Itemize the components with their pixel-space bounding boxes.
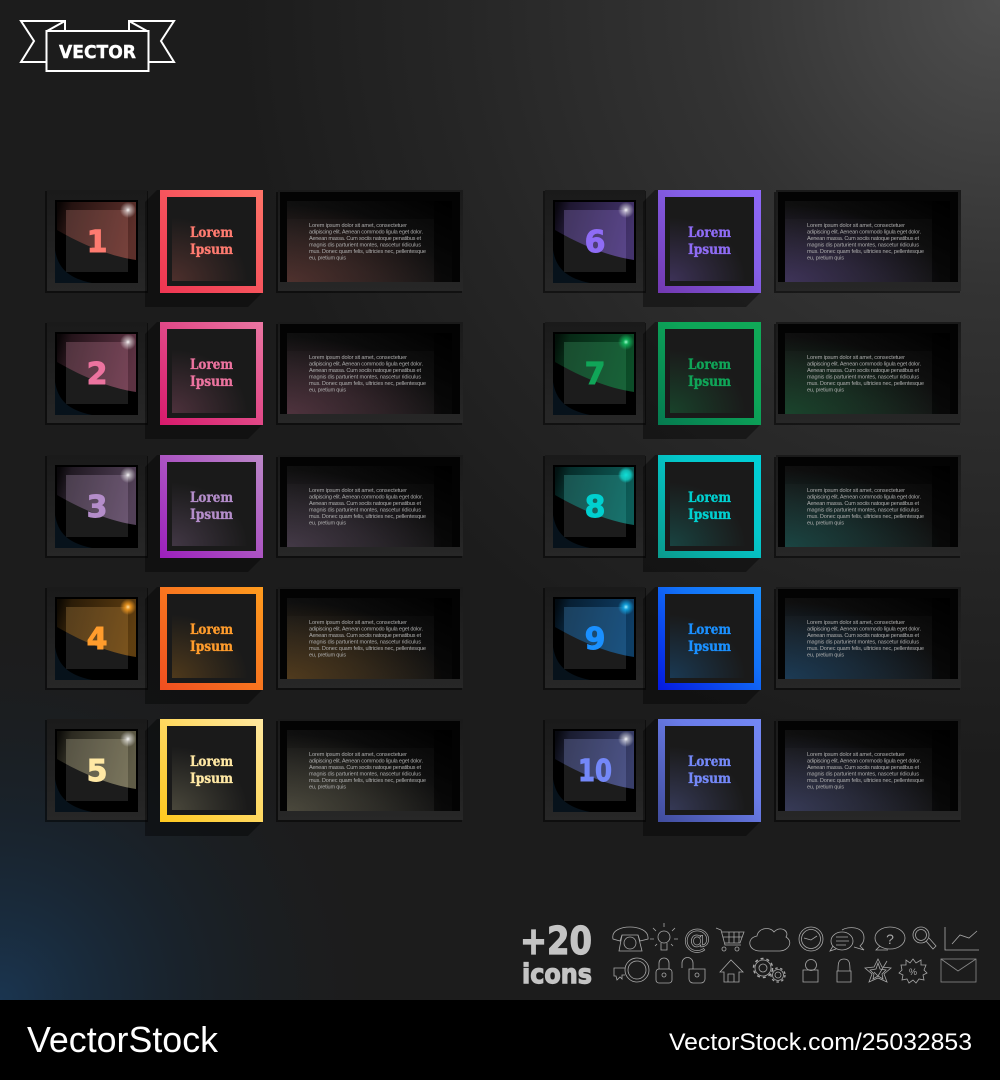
+20 icons label: +20 bbox=[520, 919, 592, 963]
title card 10: Lorem bbox=[688, 754, 731, 770]
title card 5 bbox=[145, 719, 263, 836]
number tile 6 bbox=[543, 190, 646, 293]
title card 7: Lorem bbox=[688, 357, 731, 373]
description panel 5 bbox=[276, 719, 463, 822]
number tile 6: 6 bbox=[585, 225, 605, 260]
title card 10: Ipsum bbox=[688, 771, 731, 787]
number tile 4 bbox=[45, 587, 148, 690]
title card 1: Lorem bbox=[190, 225, 233, 241]
description panel 2: Lorem ipsum dolor sit amet, consectetuer bbox=[309, 355, 407, 361]
description panel 7: adipiscing elit. Aenean commodo ligula eget dolor. bbox=[807, 362, 921, 368]
description panel 10: mus. Donec quam felis, ultricies nec, pellentesque bbox=[807, 778, 924, 784]
icon: man bbox=[803, 960, 818, 982]
description panel 1: Lorem ipsum dolor sit amet, consectetuer bbox=[309, 223, 407, 229]
description panel 7: Lorem ipsum dolor sit amet, consectetuer bbox=[807, 355, 905, 361]
number tile 1: 1 bbox=[87, 225, 107, 260]
title card 4: Lorem bbox=[190, 622, 233, 638]
description panel 2: magnis dis parturient montes, nascetur ridiculus bbox=[309, 374, 421, 380]
footer bar: VectorStock.com/25032853 bbox=[669, 1029, 972, 1056]
description panel 8: eu, pretium quis bbox=[807, 520, 844, 526]
description panel 4 bbox=[276, 587, 463, 690]
row 4 bbox=[45, 587, 463, 704]
description panel 9: mus. Donec quam felis, ultricies nec, pellentesque bbox=[807, 646, 924, 652]
description panel 4: mus. Donec quam felis, ultricies nec, pellentesque bbox=[309, 646, 426, 652]
title card 2 bbox=[145, 322, 263, 439]
description panel 5: Lorem ipsum dolor sit amet, consectetuer bbox=[309, 752, 407, 758]
description panel 6: adipiscing elit. Aenean commodo ligula eget dolor. bbox=[807, 230, 921, 236]
description panel 3: adipiscing elit. Aenean commodo ligula eget dolor. bbox=[309, 494, 423, 500]
icon: woman bbox=[837, 959, 851, 982]
icon: open lock bbox=[682, 958, 705, 983]
description panel 7: eu, pretium quis bbox=[807, 388, 844, 394]
title card 3 bbox=[145, 455, 263, 572]
description panel 10: adipiscing elit. Aenean commodo ligula eget dolor. bbox=[807, 758, 921, 764]
description panel 4: eu, pretium quis bbox=[309, 652, 346, 658]
title card 7: Ipsum bbox=[688, 374, 731, 390]
description panel 9: magnis dis parturient montes, nascetur ridiculus bbox=[807, 640, 919, 646]
icon: magnifier bbox=[913, 927, 936, 949]
icon: percent badge: % bbox=[909, 967, 917, 977]
ribbon badge: VECTOR bbox=[21, 21, 174, 71]
description panel 4: Lorem ipsum dolor sit amet, consectetuer bbox=[309, 620, 407, 626]
description panel 8 bbox=[774, 455, 961, 558]
icon: light bulb bbox=[650, 923, 678, 950]
icon: question bubble: ? bbox=[886, 931, 894, 947]
icon: house bbox=[720, 960, 743, 982]
description panel 2 bbox=[276, 322, 463, 425]
description panel 4: magnis dis parturient montes, nascetur ridiculus bbox=[309, 640, 421, 646]
title card 6: Lorem bbox=[688, 225, 731, 241]
number tile 2: 2 bbox=[87, 357, 107, 392]
title card 5: Ipsum bbox=[190, 771, 233, 787]
description panel 9 bbox=[774, 587, 961, 690]
description panel 4: Aenean massa. Cum sociis natoque penatibus et bbox=[309, 633, 421, 639]
number tile 1 bbox=[45, 190, 148, 293]
footer bar bbox=[0, 1000, 1000, 1080]
title card 10 bbox=[643, 719, 761, 836]
title card 8: Lorem bbox=[688, 490, 731, 506]
ribbon badge: VECTOR: VECTOR bbox=[59, 42, 136, 63]
description panel 2: mus. Donec quam felis, ultricies nec, pellentesque bbox=[309, 381, 426, 387]
icon: line chart bbox=[945, 927, 979, 950]
number tile 9 bbox=[543, 587, 646, 690]
description panel 5: Aenean massa. Cum sociis natoque penatibus et bbox=[309, 765, 421, 771]
description panel 1 bbox=[276, 190, 463, 293]
description panel 5: magnis dis parturient montes, nascetur ridiculus bbox=[309, 772, 421, 778]
icon: chat bubbles bbox=[830, 928, 864, 951]
icon set bbox=[613, 923, 979, 983]
number tile 10: 10 bbox=[578, 754, 612, 789]
description panel 9: Aenean massa. Cum sociis natoque penatibus et bbox=[807, 633, 919, 639]
title card 3: Lorem bbox=[190, 490, 233, 506]
icon: shopping cart bbox=[716, 928, 744, 951]
row 2 bbox=[45, 322, 463, 439]
description panel 7 bbox=[774, 322, 961, 425]
description panel 1: mus. Donec quam felis, ultricies nec, pellentesque bbox=[309, 249, 426, 255]
title card 1: Ipsum bbox=[190, 242, 233, 258]
description panel 10 bbox=[774, 719, 961, 822]
description panel 8: Aenean massa. Cum sociis natoque penatibus et bbox=[807, 501, 919, 507]
number tile 3: 3 bbox=[87, 490, 107, 525]
title card 5: Lorem bbox=[190, 754, 233, 770]
icon: gears bbox=[754, 958, 785, 982]
icon: clock bbox=[799, 927, 823, 951]
description panel 3: Aenean massa. Cum sociis natoque penatibus et bbox=[309, 501, 421, 507]
title card 9 bbox=[643, 587, 761, 704]
number tile 5: 5 bbox=[87, 754, 107, 789]
footer bar: VectorStock bbox=[27, 1019, 219, 1060]
description panel 8: Lorem ipsum dolor sit amet, consectetuer bbox=[807, 488, 905, 494]
description panel 10: eu, pretium quis bbox=[807, 784, 844, 790]
+20 icons label: icons bbox=[522, 959, 592, 990]
icon: question bubble bbox=[875, 927, 905, 950]
title card 4 bbox=[145, 587, 263, 704]
icon: at sign: @ bbox=[684, 924, 710, 955]
title card 8: Ipsum bbox=[688, 507, 731, 523]
description panel 10: Aenean massa. Cum sociis natoque penatibus et bbox=[807, 765, 919, 771]
row 5 bbox=[45, 719, 463, 836]
title card 9: Ipsum bbox=[688, 639, 731, 655]
number tile 2 bbox=[45, 322, 148, 425]
number tile 8 bbox=[543, 455, 646, 558]
description panel 9: eu, pretium quis bbox=[807, 652, 844, 658]
description panel 4: adipiscing elit. Aenean commodo ligula eget dolor. bbox=[309, 626, 423, 632]
description panel 9: Lorem ipsum dolor sit amet, consectetuer bbox=[807, 620, 905, 626]
title card 2: Lorem bbox=[190, 357, 233, 373]
icon: percent badge bbox=[899, 959, 927, 983]
title card 6 bbox=[643, 190, 761, 307]
description panel 2: eu, pretium quis bbox=[309, 388, 346, 394]
number tile 9: 9 bbox=[585, 622, 605, 657]
description panel 3 bbox=[276, 455, 463, 558]
title card 1 bbox=[145, 190, 263, 307]
icon: key bbox=[614, 958, 649, 982]
+20 icons label bbox=[520, 919, 592, 990]
number tile 4: 4 bbox=[87, 622, 107, 657]
description panel 6: mus. Donec quam felis, ultricies nec, pellentesque bbox=[807, 249, 924, 255]
description panel 2: Aenean massa. Cum sociis natoque penatibus et bbox=[309, 368, 421, 374]
description panel 10: magnis dis parturient montes, nascetur ridiculus bbox=[807, 772, 919, 778]
description panel 8: adipiscing elit. Aenean commodo ligula eget dolor. bbox=[807, 494, 921, 500]
number tile 7 bbox=[543, 322, 646, 425]
row 7 bbox=[543, 322, 961, 439]
description panel 6: Aenean massa. Cum sociis natoque penatibus et bbox=[807, 236, 919, 242]
icon: envelope bbox=[941, 959, 976, 982]
description panel 3: Lorem ipsum dolor sit amet, consectetuer bbox=[309, 488, 407, 494]
description panel 3: mus. Donec quam felis, ultricies nec, pellentesque bbox=[309, 514, 426, 520]
description panel 1: adipiscing elit. Aenean commodo ligula eget dolor. bbox=[309, 230, 423, 236]
title card 4: Ipsum bbox=[190, 639, 233, 655]
description panel 1: magnis dis parturient montes, nascetur ridiculus bbox=[309, 242, 421, 248]
description panel 10: Lorem ipsum dolor sit amet, consectetuer bbox=[807, 752, 905, 758]
description panel 3: magnis dis parturient montes, nascetur ridiculus bbox=[309, 508, 421, 514]
title card 3: Ipsum bbox=[190, 507, 233, 523]
title card 6: Ipsum bbox=[688, 242, 731, 258]
description panel 1: Aenean massa. Cum sociis natoque penatibus et bbox=[309, 236, 421, 242]
row 10 bbox=[543, 719, 961, 836]
description panel 5: mus. Donec quam felis, ultricies nec, pellentesque bbox=[309, 778, 426, 784]
row 1 bbox=[45, 190, 463, 307]
icon: star with check bbox=[865, 959, 891, 982]
number tile 10 bbox=[543, 719, 646, 822]
icon: cloud bbox=[750, 929, 790, 951]
description panel 5: adipiscing elit. Aenean commodo ligula eget dolor. bbox=[309, 758, 423, 764]
description panel 1: eu, pretium quis bbox=[309, 256, 346, 262]
number tile 8: 8 bbox=[585, 490, 605, 525]
number tile 3 bbox=[45, 455, 148, 558]
description panel 6 bbox=[774, 190, 961, 293]
description panel 2: adipiscing elit. Aenean commodo ligula eget dolor. bbox=[309, 362, 423, 368]
icon: closed lock bbox=[656, 958, 672, 983]
description panel 7: magnis dis parturient montes, nascetur ridiculus bbox=[807, 374, 919, 380]
title card 2: Ipsum bbox=[190, 374, 233, 390]
description panel 6: Lorem ipsum dolor sit amet, consectetuer bbox=[807, 223, 905, 229]
row 3 bbox=[45, 455, 463, 572]
description panel 8: magnis dis parturient montes, nascetur ridiculus bbox=[807, 508, 919, 514]
description panel 6: eu, pretium quis bbox=[807, 256, 844, 262]
icon: telephone bbox=[613, 927, 648, 951]
description panel 6: magnis dis parturient montes, nascetur ridiculus bbox=[807, 242, 919, 248]
row 9 bbox=[543, 587, 961, 704]
title card 9: Lorem bbox=[688, 622, 731, 638]
description panel 7: Aenean massa. Cum sociis natoque penatibus et bbox=[807, 368, 919, 374]
number tile 7: 7 bbox=[585, 357, 605, 392]
description panel 5: eu, pretium quis bbox=[309, 784, 346, 790]
title card 7 bbox=[643, 322, 761, 439]
description panel 7: mus. Donec quam felis, ultricies nec, pellentesque bbox=[807, 381, 924, 387]
number tile 5 bbox=[45, 719, 148, 822]
title card 8 bbox=[643, 455, 761, 572]
description panel 3: eu, pretium quis bbox=[309, 520, 346, 526]
row 8 bbox=[543, 455, 961, 572]
row 6 bbox=[543, 190, 961, 307]
description panel 8: mus. Donec quam felis, ultricies nec, pellentesque bbox=[807, 514, 924, 520]
description panel 9: adipiscing elit. Aenean commodo ligula eget dolor. bbox=[807, 626, 921, 632]
